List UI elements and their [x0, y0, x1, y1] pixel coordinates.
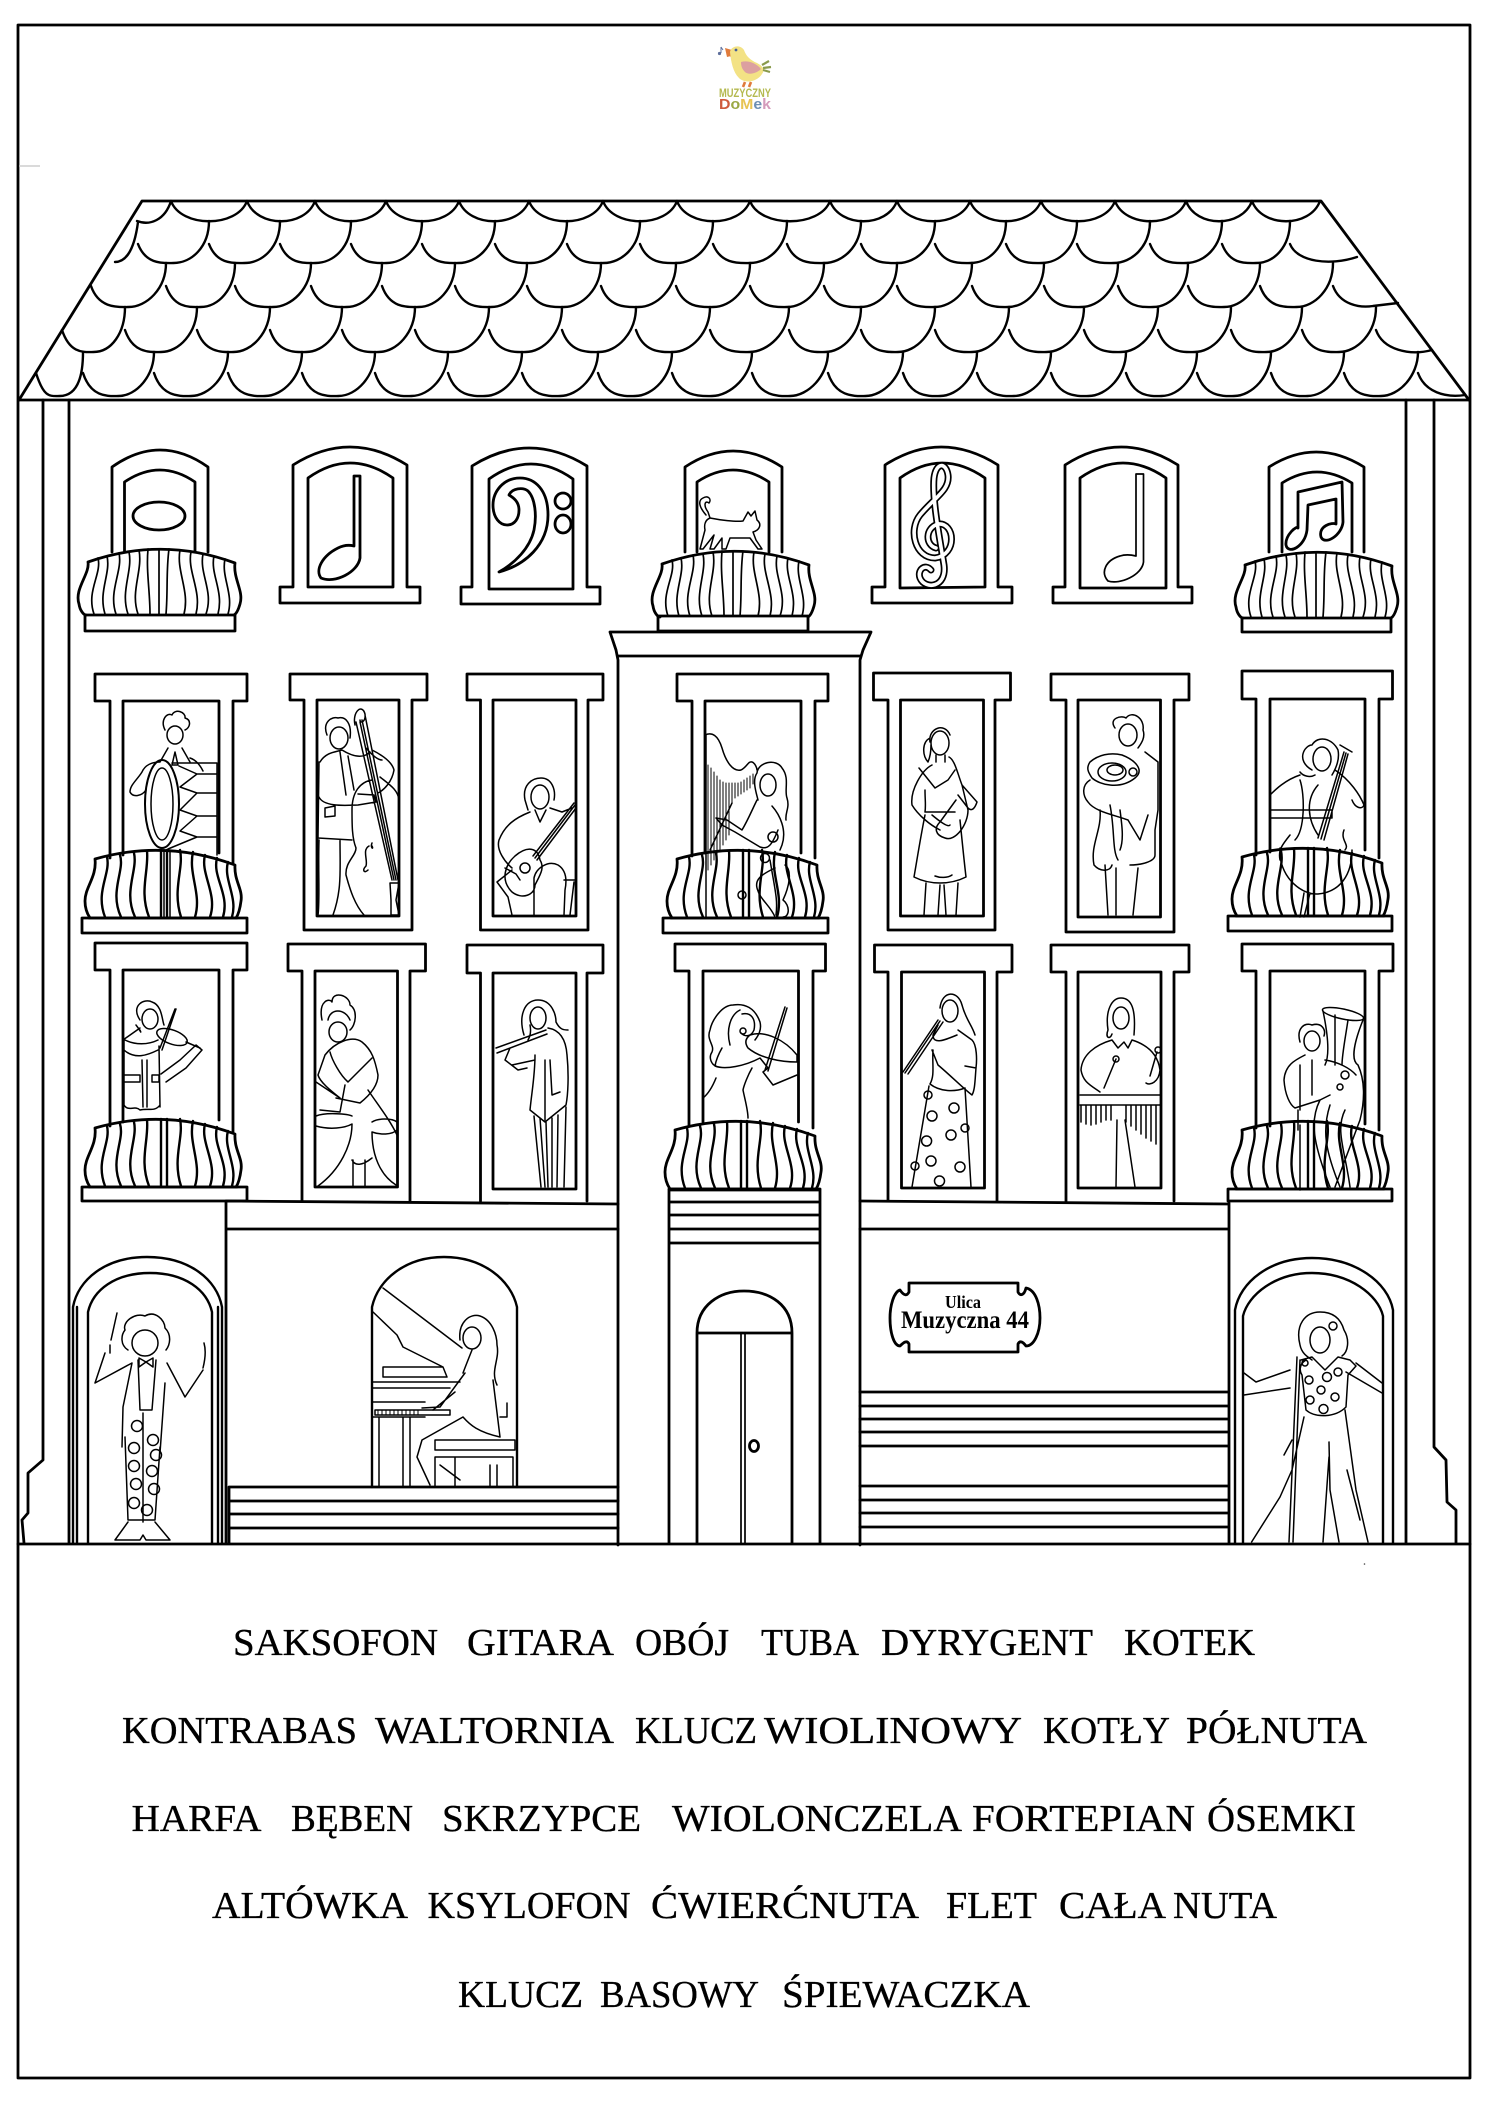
figure: flautist — [496, 1000, 568, 1187]
word list line 4: FLET — [946, 1885, 1037, 1927]
sign text: Muzyczna 44 — [901, 1307, 1029, 1334]
top row: window eighth notes with balcony — [1235, 452, 1398, 632]
balcony — [665, 1121, 821, 1189]
roof base line — [19, 399, 1469, 401]
figure: conductor — [95, 1313, 205, 1540]
word list line 4: CAŁA — [1059, 1885, 1167, 1927]
icon: quarter note — [319, 476, 360, 580]
logo wordmark: DoMek — [719, 96, 772, 113]
word list line 4: NUTA — [1173, 1885, 1278, 1927]
figure: harp and woman — [705, 734, 789, 917]
word list line 2: KOTŁY — [1043, 1710, 1170, 1752]
top row: window bass clef — [461, 448, 600, 604]
speck — [1364, 1563, 1365, 1565]
building facade lines — [18, 400, 1470, 1545]
door — [697, 1291, 792, 1543]
balcony — [663, 850, 828, 933]
figure: cellist — [1270, 739, 1364, 917]
word list line 5: KLUCZ — [458, 1974, 583, 2016]
top row: window whole note with balcony — [78, 450, 241, 631]
window: timpani player — [288, 944, 426, 1201]
logo: Muzyczny Domek — [718, 46, 772, 113]
window: viola player with balcony — [665, 944, 826, 1189]
top row: window quarter note — [280, 447, 420, 603]
word list line 1: SAKSOFON — [233, 1622, 438, 1664]
logo bird — [718, 46, 771, 87]
figure: singer — [1244, 1312, 1382, 1542]
word list line 3 — [132, 1798, 1356, 1840]
icon: eighth notes — [1286, 482, 1343, 549]
central door bay — [669, 1190, 820, 1543]
left bays — [226, 1201, 618, 1543]
arch: conductor — [73, 1257, 222, 1543]
ground line — [18, 1543, 1470, 1545]
window: tuba player with balcony — [1228, 944, 1393, 1201]
word list line 4 — [212, 1885, 1278, 1927]
word list line 3: SKRZYPCE — [442, 1798, 641, 1840]
top row: window cat with balcony — [652, 451, 815, 631]
street sign — [890, 1283, 1040, 1352]
word list line 1: OBÓJ — [635, 1622, 729, 1664]
figure: timpani player — [316, 995, 397, 1187]
logo wordmark: MUZYCZNY — [719, 86, 771, 100]
window: violinist with balcony — [82, 943, 247, 1201]
word list line 2: WIOLINOWY — [764, 1710, 1022, 1752]
figure: saxophonist — [912, 728, 977, 915]
word list line 2: WALTORNIA — [375, 1710, 615, 1752]
word list line 4: KSYLOFON — [428, 1885, 630, 1927]
arch: singer — [1235, 1258, 1393, 1543]
word list line 1: TUBA — [761, 1622, 860, 1664]
balcony — [1228, 1121, 1392, 1201]
roof tiles row 3 — [91, 263, 1398, 307]
word list line 3: WIOLONCZELA — [672, 1798, 963, 1840]
arch: pianist — [372, 1257, 517, 1487]
figure: drummer — [130, 711, 217, 917]
word list line 1: GITARA — [467, 1622, 615, 1664]
balcony — [1235, 552, 1398, 632]
figure: viola player — [703, 1005, 797, 1118]
word list line 2: KONTRABAS — [122, 1710, 357, 1752]
word list line 5: ŚPIEWACZKA — [782, 1974, 1031, 2016]
door knob — [750, 1440, 758, 1452]
left pilaster — [22, 400, 69, 1543]
word list line 3: FORTEPIAN — [972, 1798, 1195, 1840]
figure: piano — [373, 1288, 507, 1487]
word list line 4: ĆWIERĆNUTA — [651, 1885, 920, 1927]
figure: xylophone player — [1080, 998, 1161, 1187]
sign text: Ulica — [945, 1292, 981, 1312]
roof tiles row 2 — [115, 221, 1357, 263]
word list line 1: DYRYGENT — [881, 1622, 1093, 1664]
balcony — [652, 551, 815, 631]
icon: bass clef — [493, 478, 571, 572]
top row: window treble clef — [872, 447, 1012, 603]
window: saxophonist — [874, 673, 1010, 930]
balcony — [82, 850, 247, 933]
window: harpist with balcony — [663, 674, 828, 933]
figure: horn player — [1084, 715, 1158, 915]
balcony — [78, 549, 241, 631]
roof outline — [19, 201, 1469, 400]
logo wordmark — [719, 86, 772, 113]
word list line 3: ÓSEMKI — [1207, 1798, 1356, 1840]
figure: tuba player — [1284, 1005, 1365, 1190]
right pilaster — [1406, 400, 1456, 1543]
word list line 4: ALTÓWKA — [212, 1885, 409, 1927]
top row: window half note — [1053, 447, 1192, 603]
roof tiles row 1 — [137, 201, 1320, 223]
figure: oboist — [903, 994, 977, 1187]
word list line 5 — [458, 1974, 1031, 2016]
window: double bass player — [290, 674, 427, 930]
sign text — [901, 1292, 1029, 1334]
word list line 1: KOTEK — [1124, 1622, 1256, 1664]
word list — [122, 1622, 1368, 2016]
word list line 3: HARFA — [132, 1798, 262, 1840]
word list line 2: PÓŁNUTA — [1186, 1710, 1368, 1752]
window: cellist with balcony — [1228, 671, 1392, 931]
roof tiles row 5 — [36, 352, 1465, 396]
right bays — [860, 1201, 1229, 1543]
word list line 2: KLUCZ — [635, 1710, 757, 1752]
window: guitarist — [467, 674, 603, 930]
word list line 5: BASOWY — [600, 1974, 759, 2016]
roof tiles row 4 — [62, 307, 1432, 352]
roof — [19, 201, 1469, 400]
figure: guitarist — [497, 778, 576, 915]
window: oboist — [874, 945, 1012, 1201]
balcony — [82, 1119, 247, 1201]
window: xylophone player — [1051, 945, 1189, 1201]
window: bass drum player — [82, 674, 247, 933]
word list line 2 — [122, 1710, 1368, 1752]
icon: cat — [700, 497, 762, 549]
figure: violinist — [123, 1001, 202, 1110]
word list line 1 — [233, 1622, 1256, 1664]
window: french horn player — [1051, 674, 1189, 932]
word list line 3: BĘBEN — [291, 1798, 413, 1840]
central column — [610, 632, 871, 1545]
figure: pianist — [417, 1315, 515, 1487]
icon: treble clef — [914, 466, 952, 585]
icon: half note — [1104, 474, 1144, 582]
balcony — [1228, 848, 1392, 931]
icon: whole note — [133, 502, 185, 530]
margin mark — [19, 165, 40, 167]
figure: double bass — [318, 709, 399, 915]
window: flautist — [467, 945, 603, 1201]
